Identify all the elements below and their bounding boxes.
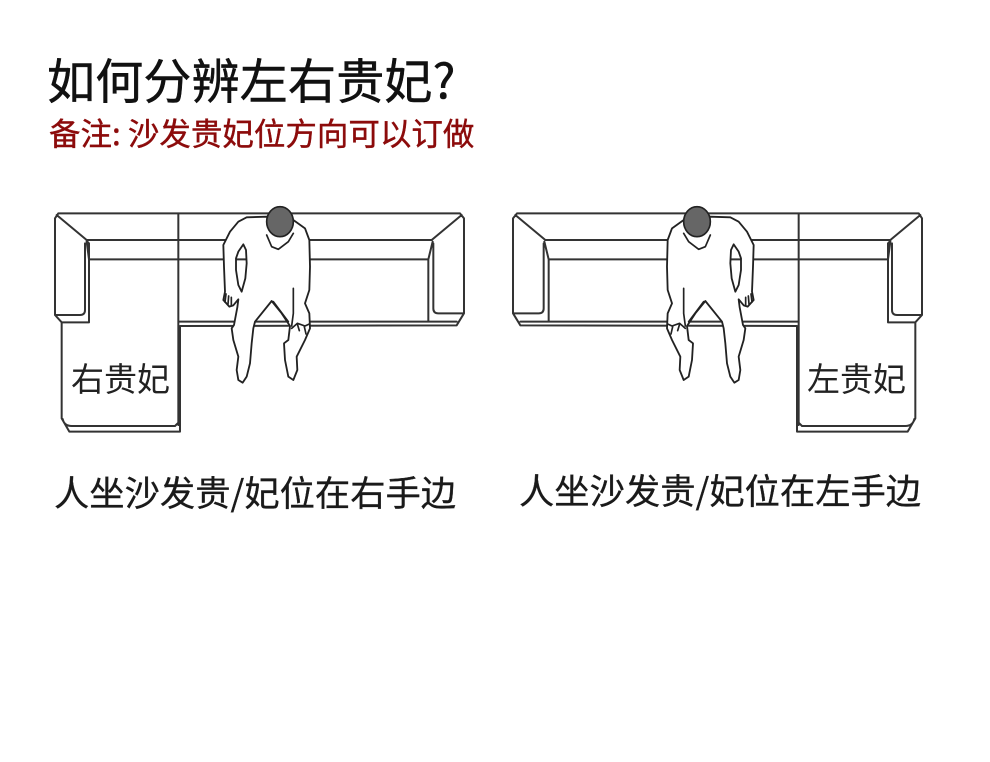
person seated, top view bbox=[667, 207, 754, 383]
person seated, top view bbox=[223, 207, 310, 383]
title: 如何分辨左右贵妃? bbox=[47, 42, 456, 112]
head bbox=[684, 207, 710, 237]
head bbox=[267, 207, 293, 237]
caption: right chaise: 人坐沙发贵/妃位在右手边 bbox=[54, 466, 456, 517]
label: right chaise: 右贵妃 bbox=[71, 353, 170, 401]
diagram: left chaise sofa bbox=[513, 207, 922, 432]
sofa outline: right chaise bbox=[55, 213, 464, 432]
caption: left chaise: 人坐沙发贵/妃位在左手边 bbox=[519, 464, 921, 515]
label: left chaise: 左贵妃 bbox=[807, 353, 906, 401]
sofa outline: left chaise bbox=[513, 213, 922, 432]
diagram: right chaise sofa bbox=[55, 207, 464, 432]
subtitle note: 备注: 沙发贵妃位方向可以订做 bbox=[49, 109, 474, 155]
